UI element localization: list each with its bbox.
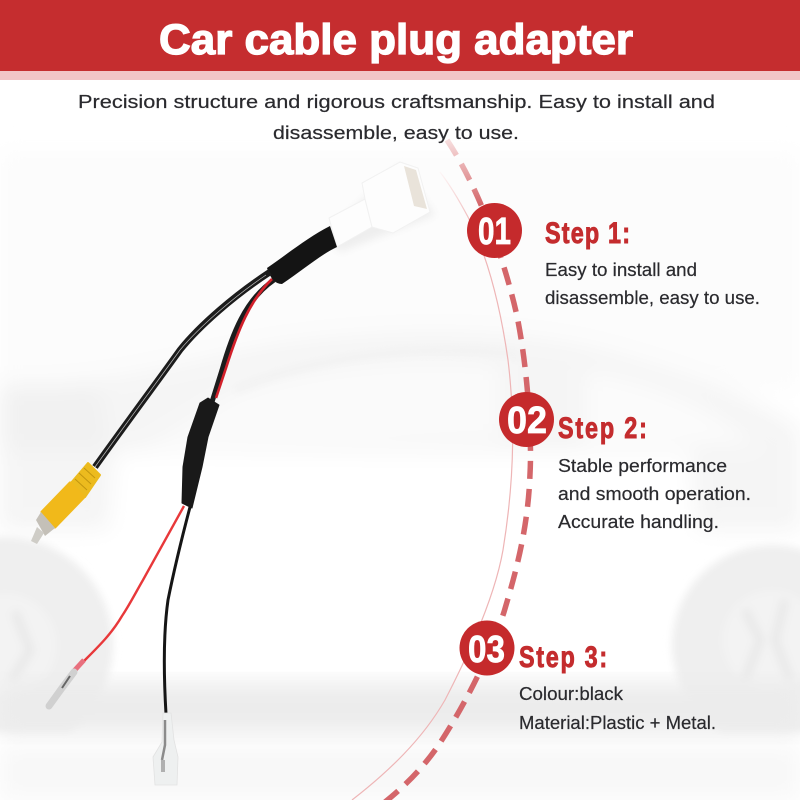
badge 02 — [499, 392, 554, 447]
video wire — [95, 272, 270, 467]
step 3 — [460, 620, 716, 733]
step 2 text: and smooth operation. — [558, 483, 751, 504]
badge 03: 03 — [468, 629, 505, 671]
step 1 text: disassemble, easy to use. — [545, 287, 760, 308]
white connector — [325, 162, 435, 252]
thin curved line — [352, 172, 513, 800]
step 3 heading: Step 3: — [519, 640, 607, 674]
step 3 text: Colour:black — [519, 683, 624, 704]
title: Car cable plug adapter — [159, 16, 633, 64]
step 1 text — [545, 259, 760, 308]
yellow RCA plug — [31, 463, 100, 544]
badge 01: 01 — [478, 211, 511, 253]
red and black twin wire — [212, 279, 274, 402]
step 2 heading: Step 2: — [558, 411, 647, 445]
dashed curved path — [385, 140, 530, 800]
step 2 — [499, 392, 751, 532]
step 1 text: Easy to install and — [545, 259, 697, 280]
step 3 text: Material:Plastic + Metal. — [519, 712, 716, 733]
step 1 — [467, 203, 760, 308]
intro text: Precision structure and rigorous craftsmanship. Easy to install and — [78, 91, 715, 112]
black wire and blade terminal — [153, 507, 190, 785]
step 2 text: Accurate handling. — [558, 511, 719, 532]
badge 01 — [467, 203, 522, 258]
background: blurred car silhouette — [0, 340, 800, 738]
red wire and bullet terminal — [49, 506, 184, 706]
intro text: disassemble, easy to use. — [273, 122, 519, 143]
intro text — [78, 91, 715, 143]
badge 02: 02 — [507, 400, 547, 442]
cable assembly — [31, 162, 435, 785]
step 2 text — [558, 455, 751, 532]
step 1 heading: Step 1: — [545, 216, 630, 250]
badge 03 — [460, 620, 514, 676]
braided sleeve — [267, 226, 337, 284]
step 2 text: Stable performance — [558, 455, 727, 476]
inline module — [182, 398, 219, 508]
header banner — [0, 0, 800, 80]
step 3 text — [519, 683, 716, 733]
